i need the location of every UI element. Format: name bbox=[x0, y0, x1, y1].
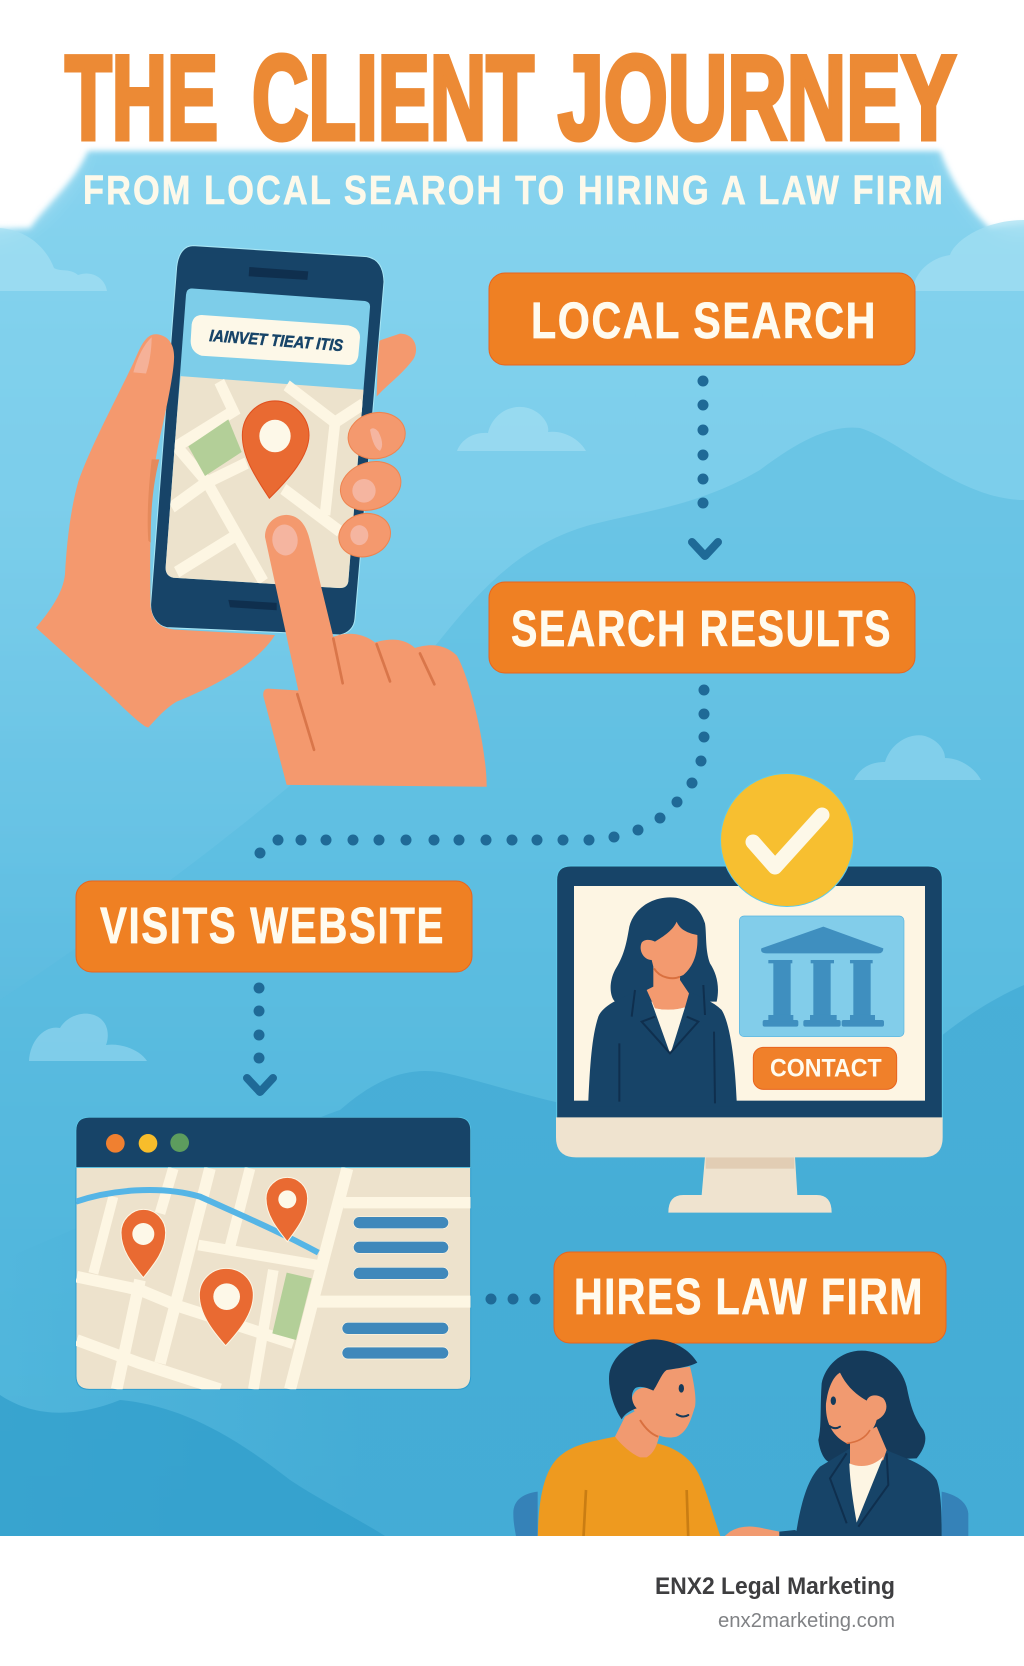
finger 2 bbox=[336, 455, 406, 517]
lawyer bbox=[588, 897, 737, 1107]
map pin center bbox=[199, 1268, 253, 1346]
left hand bbox=[36, 334, 275, 728]
step: local search bbox=[489, 273, 915, 365]
finger 1 bbox=[345, 409, 408, 463]
brand url: enx2marketing.com bbox=[718, 1609, 895, 1632]
contact button bbox=[753, 1047, 897, 1089]
step: local search: LOCAL SEARCH bbox=[531, 292, 877, 349]
phone body bbox=[151, 246, 384, 635]
map pin bbox=[242, 401, 309, 498]
client bbox=[538, 1339, 722, 1540]
cloud: right bbox=[854, 735, 981, 780]
contact button: CONTACT bbox=[770, 1055, 882, 1083]
step: hires law firm bbox=[554, 1252, 946, 1343]
search bar bbox=[191, 315, 360, 365]
cloud: left bbox=[29, 1014, 147, 1061]
step: search results bbox=[489, 582, 915, 673]
phone speaker bbox=[249, 267, 308, 280]
finger 3 bbox=[336, 509, 394, 561]
window buttons bbox=[106, 1133, 189, 1153]
map roads bbox=[76, 1168, 471, 1389]
step: search results: SEARCH RESULTS bbox=[511, 600, 892, 657]
step: hires law firm: HIRES LAW FIRM bbox=[574, 1268, 924, 1325]
attorney bbox=[795, 1351, 942, 1540]
title: THE bbox=[65, 31, 218, 165]
dotted path: local search to search results bbox=[692, 376, 718, 556]
map pin left bbox=[121, 1209, 166, 1278]
monitor stand bbox=[668, 1157, 832, 1213]
cloud: top right bbox=[912, 220, 1024, 291]
phone home bar bbox=[228, 600, 277, 610]
phone screen map bbox=[160, 285, 377, 593]
client and lawyer meeting bbox=[513, 1339, 968, 1540]
check badge bbox=[720, 774, 854, 906]
footer band bbox=[0, 1536, 1024, 1666]
step: visits website: VISITS WEBSITE bbox=[100, 897, 445, 954]
monitor frame bbox=[557, 866, 942, 1118]
chairs bbox=[513, 1492, 968, 1540]
step: visits website bbox=[76, 881, 472, 972]
monitor chin bbox=[556, 1117, 943, 1157]
brand name: ENX2 Legal Marketing bbox=[655, 1573, 895, 1600]
monitor showing law firm website bbox=[556, 866, 943, 1213]
illustration: hand holding phone with map bbox=[36, 246, 487, 787]
title bbox=[65, 31, 956, 165]
browser window with map bbox=[76, 1117, 471, 1389]
firm panel bbox=[739, 916, 904, 1037]
dotted path: visits website to map bbox=[247, 982, 273, 1092]
phone search text: IAINVET TIEAT ITIS bbox=[209, 327, 344, 355]
title: CLIENT bbox=[252, 31, 534, 165]
browser body bbox=[76, 1167, 471, 1389]
cloud: middle bbox=[457, 407, 586, 451]
pointing hand bbox=[263, 515, 487, 787]
listing bars bbox=[342, 1217, 449, 1359]
thumb nail bbox=[133, 337, 152, 374]
handshake bbox=[720, 1526, 810, 1540]
palm crease bbox=[148, 459, 159, 543]
back finger bbox=[377, 334, 416, 396]
dotted path: map to hires law firm bbox=[486, 1294, 540, 1304]
dotted path: search results to visits website bbox=[254, 684, 710, 858]
monitor screen bbox=[574, 886, 925, 1101]
cloud: top left bbox=[0, 228, 107, 291]
browser title bar bbox=[76, 1117, 471, 1167]
map pin top bbox=[266, 1177, 308, 1242]
